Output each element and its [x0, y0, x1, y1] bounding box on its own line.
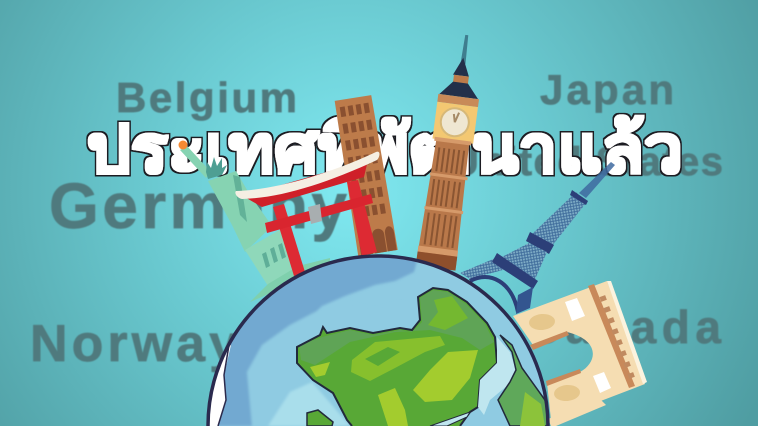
country names: Japan	[540, 66, 674, 113]
icon: eiffel tower	[460, 162, 615, 314]
title: ประเทศที่พัฒนาแล้ว	[87, 102, 683, 186]
country names: Norway	[30, 315, 238, 373]
country names: Canada	[527, 301, 721, 353]
eastern land	[498, 335, 550, 426]
island	[307, 410, 333, 426]
ocean shading	[219, 258, 418, 426]
country names: United States	[450, 140, 723, 184]
continent	[297, 288, 497, 426]
icon: leaning tower of pisa	[334, 95, 398, 256]
bay	[478, 337, 516, 415]
country names: Belgium	[116, 74, 297, 121]
icon: arc de triomphe	[513, 281, 647, 426]
globe	[208, 250, 550, 426]
continent highlights	[299, 290, 494, 365]
continent outline	[297, 288, 497, 426]
icon: torii gate	[235, 152, 380, 276]
ice sliver	[208, 345, 231, 426]
country names: Germany	[49, 170, 347, 242]
icon: big ben	[416, 32, 487, 271]
country names	[30, 66, 723, 373]
icon: statue of liberty	[178, 140, 330, 302]
